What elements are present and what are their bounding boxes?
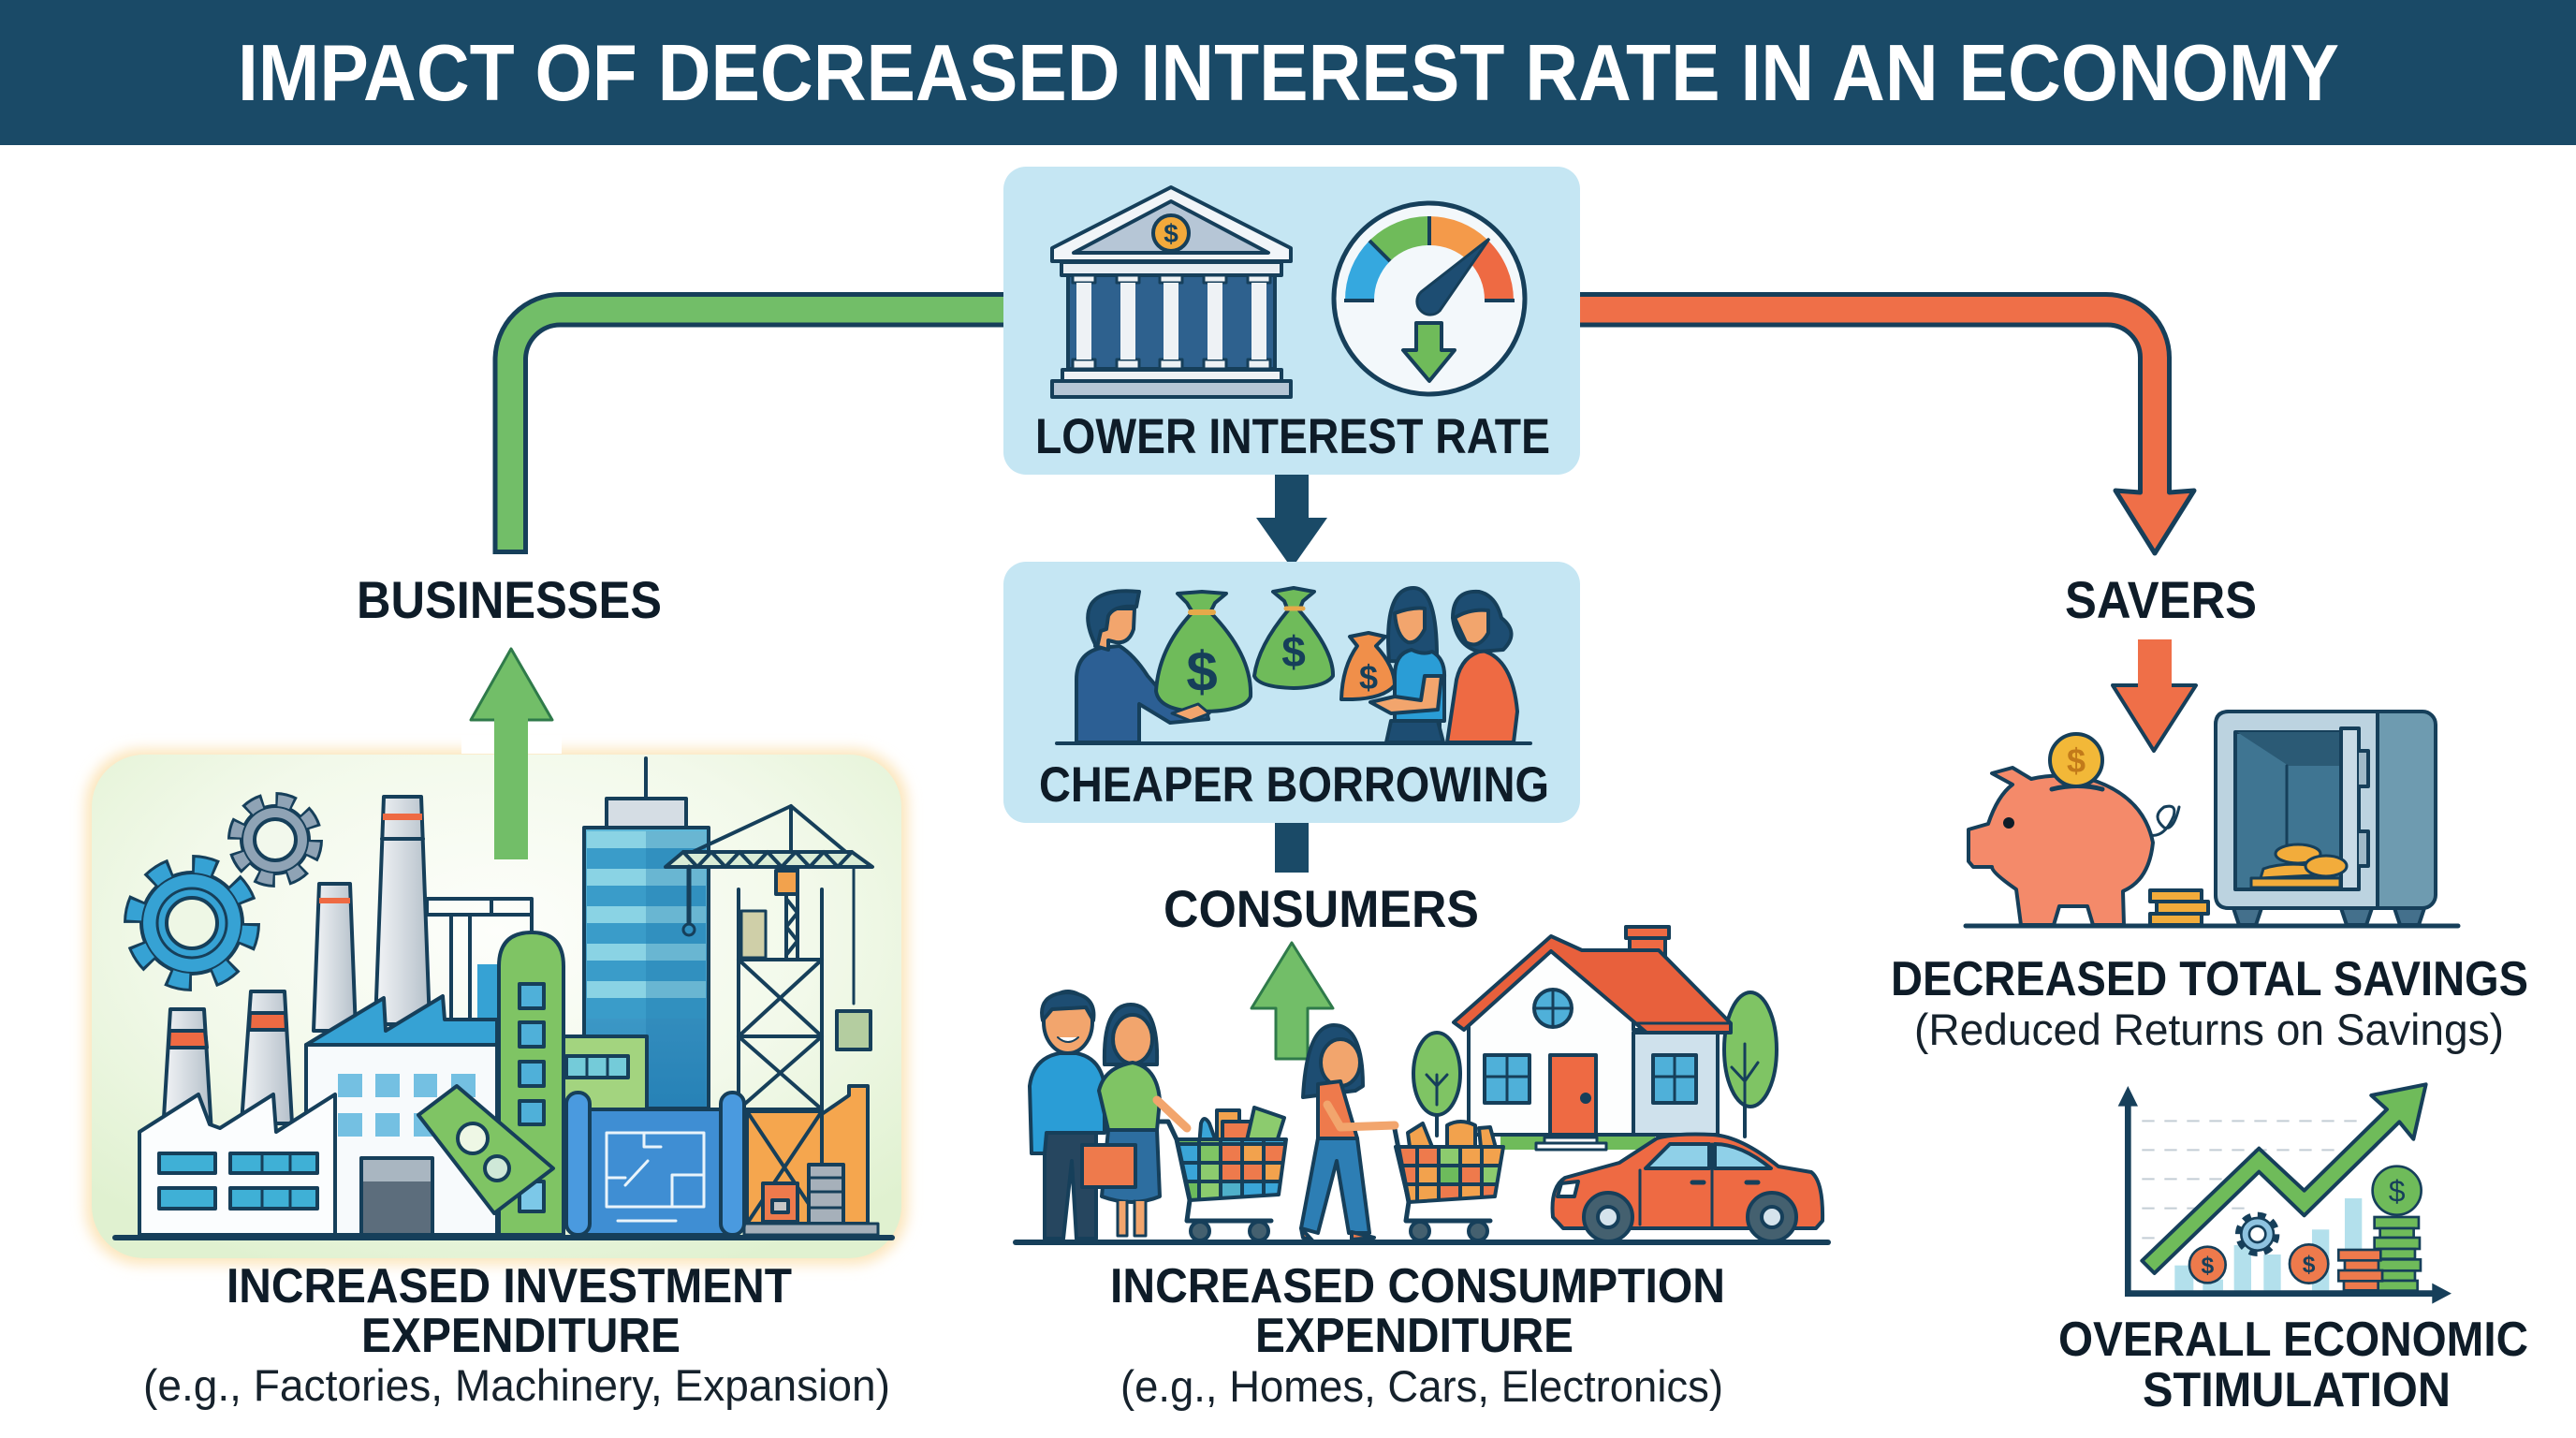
ground line xyxy=(1057,741,1530,745)
text: increased consumption expenditure xyxy=(1110,1259,1725,1411)
heading: savers: SAVERS xyxy=(2065,570,2257,629)
icon: large money bag xyxy=(1156,592,1251,721)
car xyxy=(1553,1135,1822,1241)
text: increased consumption expenditure: EXPENDITURE xyxy=(1255,1309,1573,1363)
icon: piggy bank xyxy=(1969,734,2179,925)
panel: lower interest rate xyxy=(1003,167,1580,475)
chart: economic stimulation xyxy=(2118,1084,2452,1304)
icon: open safe xyxy=(2216,712,2436,925)
gear xyxy=(2240,1217,2275,1252)
axes xyxy=(2128,1102,2437,1294)
icon: small orange bag: $ xyxy=(1359,658,1378,697)
coins: $ xyxy=(2389,1174,2406,1208)
arrow: red connector to savers xyxy=(1580,294,2194,553)
icon: medium money bag xyxy=(1254,588,1333,688)
family: woman with bag xyxy=(1082,1005,1187,1236)
family: woman with cart xyxy=(1301,1025,1395,1240)
icon: blue gear xyxy=(134,865,250,981)
icon: grey gear xyxy=(236,800,315,879)
icon: large money bag: $ xyxy=(1186,640,1218,703)
icon: woman receiving loan xyxy=(1386,588,1444,742)
ground line xyxy=(1016,1240,1828,1245)
tree left xyxy=(1413,1033,1460,1136)
cart two xyxy=(1395,1122,1503,1240)
arrow: green up arrow xyxy=(471,649,552,859)
coin stacks xyxy=(2338,1217,2421,1291)
icon: banknote xyxy=(418,1086,553,1213)
growth arrow xyxy=(2142,1084,2426,1273)
low green building xyxy=(564,1036,647,1109)
tree right xyxy=(1724,992,1777,1137)
header banner xyxy=(0,0,2576,145)
text: increased investment expenditure: INCREASED INVESTMENT xyxy=(227,1259,792,1313)
text: decreased total savings xyxy=(1891,952,2528,1054)
left smokestacks and factory xyxy=(139,991,335,1235)
arrow: navy down arrow xyxy=(1256,475,1327,568)
coins: $ xyxy=(2201,1254,2214,1279)
arrow: green up arrow xyxy=(1251,943,1333,1059)
dashed grid xyxy=(2142,1121,2359,1238)
panel: business investment xyxy=(85,649,908,1265)
text: increased consumption expenditure: INCREASED CONSUMPTION xyxy=(1110,1259,1725,1313)
text: increased investment expenditure: EXPENDITURE xyxy=(361,1309,681,1363)
icon: second woman xyxy=(1447,592,1517,742)
icon: piggy bank: $ xyxy=(2067,741,2086,780)
text: decreased total savings: (Reduced Returns on Savings) xyxy=(1914,1005,2504,1054)
icon: rate gauge xyxy=(1334,203,1525,394)
text: decreased total savings: DECREASED TOTAL SAVINGS xyxy=(1891,952,2528,1006)
text: overall economic stimulation: STIMULATION xyxy=(2143,1363,2451,1417)
label: lower interest rate: LOWER INTEREST RATE xyxy=(1035,409,1550,464)
construction crane and scaffold xyxy=(666,806,872,1109)
skyscraper xyxy=(584,758,709,1108)
cart one xyxy=(1149,1108,1286,1240)
text: increased investment expenditure: (e.g., Factories, Machinery, Expansion) xyxy=(143,1360,890,1410)
ground line xyxy=(115,1235,892,1240)
central factory xyxy=(306,996,497,1235)
illustration: consumers xyxy=(1016,927,1828,1242)
heading: consumers: CONSUMERS xyxy=(1164,879,1479,938)
text: increased investment expenditure xyxy=(143,1259,890,1410)
text: overall economic stimulation: OVERALL ECONOMIC xyxy=(2058,1313,2528,1367)
icon: central bank: $ xyxy=(1164,219,1178,248)
icon: small orange bag xyxy=(1341,633,1442,713)
title: IMPACT OF DECREASED INTEREST RATE IN AN ECONOMY xyxy=(238,29,2339,118)
heading: businesses: BUSINESSES xyxy=(357,570,662,629)
family: man xyxy=(1030,991,1105,1239)
icon: central bank xyxy=(1052,187,1291,397)
bars xyxy=(2174,1198,2362,1290)
tall chimneys xyxy=(314,797,532,1031)
coins: $ xyxy=(2303,1253,2316,1278)
orange site building xyxy=(744,1086,878,1235)
green tower xyxy=(499,932,564,1235)
icon: man handing loan xyxy=(1076,591,1208,742)
icon: medium money bag: $ xyxy=(1281,627,1306,676)
house xyxy=(1454,927,1731,1150)
ground line: savers xyxy=(1966,923,2458,929)
coins xyxy=(2189,1167,2422,1284)
arrow: red arrow from savers xyxy=(2113,639,2196,751)
label: cheaper borrowing: CHEAPER BORROWING xyxy=(1039,757,1549,813)
connector below cheaper borrowing xyxy=(1275,822,1309,873)
panel: cheaper borrowing xyxy=(1003,562,1580,823)
text: increased consumption expenditure: (e.g., Homes, Cars, Electronics) xyxy=(1120,1361,1723,1411)
arrow: green connector to businesses xyxy=(495,294,1005,552)
icon: coin stack xyxy=(2150,890,2208,925)
icon: blueprint xyxy=(566,1093,744,1235)
text: overall economic stimulation xyxy=(2058,1313,2528,1417)
